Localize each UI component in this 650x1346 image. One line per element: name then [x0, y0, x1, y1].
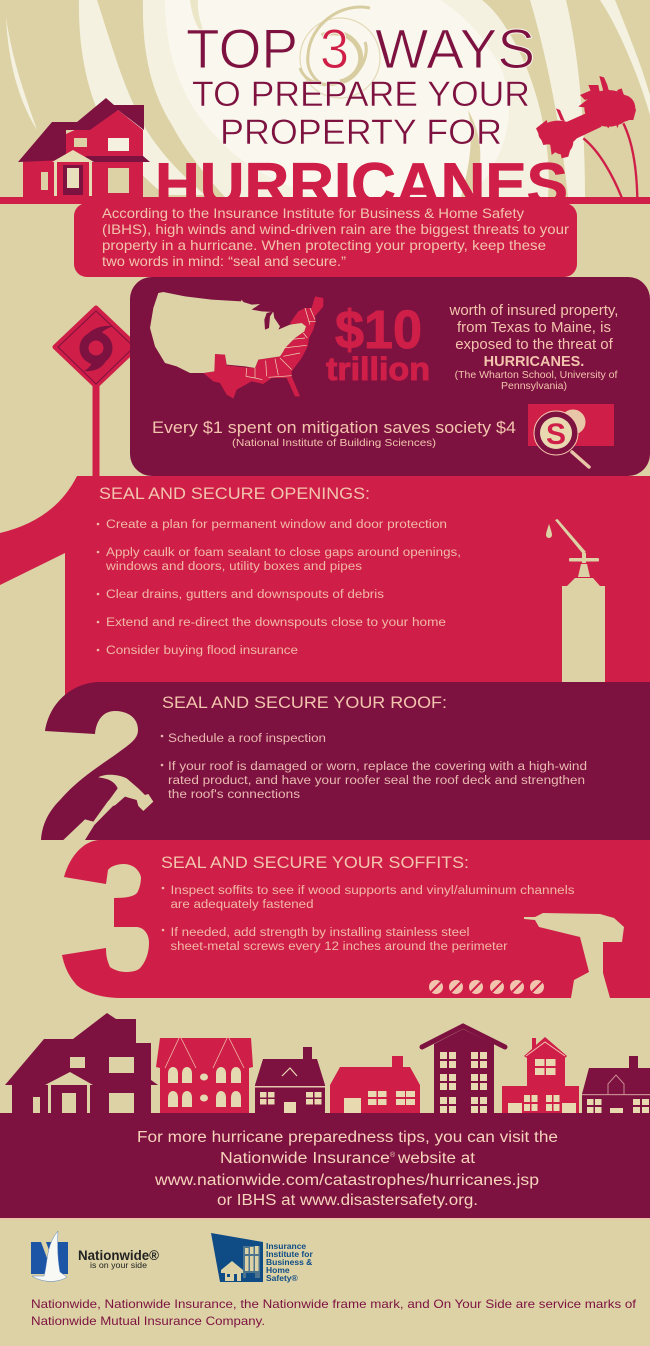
openings checklist: Extend and re-direct the downspouts close to your home — [106, 617, 446, 629]
map: United States — [150, 292, 323, 399]
soffits checklist: sheet-metal screws every 12 inches around the perimeter — [170, 941, 508, 953]
icon: house — [18, 98, 150, 197]
title: 3 — [320, 17, 349, 80]
hurricane swirl background — [6, 0, 650, 197]
panel: statistics — [130, 277, 650, 476]
panel: introduction: two words in mind: “seal and secure.” — [102, 253, 346, 269]
openings checklist: Clear drains, gutters and downspouts of debris — [106, 589, 384, 601]
text: further tips: For more hurricane preparedness tips, you can visit the — [137, 1129, 558, 1146]
soffits checklist: are adequately fastened — [170, 899, 314, 911]
text: mitigation savings — [152, 418, 516, 449]
text: further tips: www.nationwide.com/catastrophes/hurricanes.jsp — [154, 1172, 539, 1189]
logo: Nationwide: Nationwide® — [78, 1247, 160, 1263]
house: crimson shop house — [502, 1037, 579, 1113]
big number: $10 trillion: trillion — [326, 351, 430, 387]
house: crimson with garage — [330, 1056, 420, 1113]
house: crimson gabled manor — [156, 1036, 253, 1113]
house: large maroon — [5, 1013, 158, 1113]
panel: section 1 seal and secure openings — [0, 476, 650, 700]
openings checklist: Create a plan for permanent window and door protection — [106, 519, 447, 531]
text: further tips: ® — [390, 1151, 396, 1159]
house: small maroon — [255, 1047, 325, 1113]
icon: magnifier over dollar — [528, 404, 614, 467]
title — [155, 17, 568, 218]
roof checklist: the roof's connections — [168, 789, 300, 801]
openings checklist — [97, 519, 461, 657]
footer: service mark notice: Nationwide Mutual Insurance Company. — [31, 1314, 265, 1328]
heading: openings: SEAL AND SECURE OPENINGS: — [99, 485, 370, 503]
icon: hammer — [63, 775, 153, 840]
panel: introduction: According to the Insurance Institute for Business & Home Safety — [102, 205, 524, 221]
openings checklist: Consider buying flood insurance — [106, 645, 298, 657]
icon: palm trees — [536, 76, 637, 197]
text: further tips: or IBHS at www.disastersafety.org. — [217, 1192, 478, 1209]
logo: IBHS: Institute for — [266, 1249, 313, 1259]
icon: caulk gun — [546, 519, 605, 682]
panel: more information band — [0, 1113, 650, 1220]
big number: $10 trillion — [326, 300, 430, 387]
icon: power drill — [524, 913, 624, 998]
text: exposed property: from Texas to Maine, is — [457, 319, 611, 336]
icon: screws — [429, 980, 544, 994]
central eye of the swirl — [300, 7, 380, 98]
text: mitigation savings: Every $1 spent on mitigation saves society $4 — [152, 418, 516, 437]
roof checklist — [161, 733, 587, 801]
roof checklist: rated product, and have your roofer seal the roof deck and strengthen — [168, 775, 585, 787]
icon: hurricane warning sign — [55, 308, 137, 480]
panel: section 2 seal and secure your roof — [41, 682, 650, 840]
title: HURRICANES — [155, 151, 568, 218]
neighbourhood skyline — [5, 1013, 650, 1113]
panel: section 3 seal and secure your soffits — [62, 840, 650, 998]
heading: roof: SEAL AND SECURE YOUR ROOF: — [162, 694, 447, 712]
roof checklist: Schedule a roof inspection — [168, 733, 326, 745]
title: WAYS — [375, 17, 535, 80]
text: mitigation savings: (National Institute of Building Sciences) — [232, 437, 436, 449]
title: PROPERTY FOR — [220, 113, 502, 152]
panel: introduction: (IBHS), high winds and wind-driven rain are the biggest threats to your — [102, 221, 569, 237]
roof checklist: If your roof is damaged or worn, replace the covering with a high-wind — [168, 761, 587, 773]
text: further tips: website at — [397, 1150, 476, 1167]
big number: $10 trillion: $10 — [335, 300, 422, 360]
openings checklist: windows and doors, utility boxes and pipes — [105, 561, 362, 573]
panel: introduction: property in a hurricane. When protecting your property, keep these — [102, 237, 546, 253]
text: exposed property — [449, 302, 618, 392]
text: exposed property: Pennsylvania) — [501, 380, 567, 392]
logo: IBHS: Home — [266, 1265, 290, 1275]
house: maroon at right edge — [582, 1056, 650, 1113]
building: maroon apartment tower — [422, 1026, 505, 1113]
logo: IBHS: Safety® — [266, 1273, 299, 1283]
soffits checklist — [162, 885, 575, 953]
panel: introduction — [74, 203, 577, 277]
text: exposed property: HURRICANES. — [484, 354, 584, 370]
soffits checklist: Inspect soffits to see if wood supports and vinyl/aluminum channels — [170, 885, 575, 897]
logo: Nationwide: is on your side — [90, 1261, 148, 1270]
icon: magnifier over dollar: S — [546, 418, 566, 451]
title: TO PREPARE YOUR — [192, 75, 530, 114]
ground line — [0, 197, 650, 204]
text: exposed property: (The Wharton School, University of — [455, 369, 617, 381]
logo: Nationwide — [31, 1231, 160, 1281]
footer: service mark notice — [31, 1297, 637, 1328]
openings checklist: Apply caulk or foam sealant to close gaps around openings, — [106, 547, 461, 559]
logo: IBHS: Business & — [266, 1257, 312, 1267]
text: exposed property: worth of insured property, — [449, 302, 618, 319]
soffits checklist: If needed, add strength by installing stainless steel — [170, 927, 470, 939]
logo: IBHS: Insurance — [266, 1241, 306, 1251]
text: further tips: Nationwide Insurance — [220, 1150, 390, 1167]
text: further tips — [137, 1129, 558, 1209]
heading: soffits: SEAL AND SECURE YOUR SOFFITS: — [161, 854, 469, 872]
footer: service mark notice: Nationwide, Nationwide Insurance, the Nationwide frame mark, and On Your Side are service marks of — [31, 1297, 637, 1311]
logo: IBHS — [211, 1233, 313, 1283]
text: exposed property: exposed to the threat of — [455, 336, 614, 353]
title: TOP — [186, 17, 298, 80]
